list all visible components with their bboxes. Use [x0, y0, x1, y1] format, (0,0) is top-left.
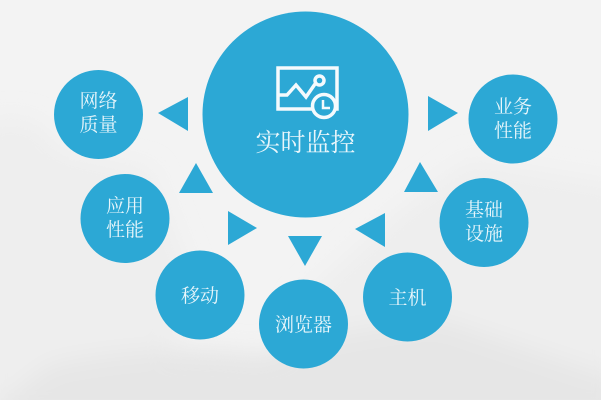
node: 主机: [363, 252, 452, 342]
node: 业务性能: [468, 74, 558, 164]
node: 浏览器: 浏览器: [275, 314, 332, 336]
arrow: up from 基础设施: [404, 162, 438, 192]
arrow: right from 移动: [228, 211, 257, 245]
node: 移动: [156, 250, 244, 340]
arrow: to 网络质量: [158, 97, 188, 131]
node: 应用性能: 性能: [106, 219, 144, 241]
node: 网络质量: [54, 70, 143, 159]
central circle: 实时监控: [202, 12, 408, 218]
heading: 实时监控: 实时监控: [255, 129, 356, 157]
icon: monitoring chart with clock: [278, 68, 337, 118]
node: 主机: 主机: [388, 287, 427, 309]
node: 业务性能: 业务: [494, 96, 532, 118]
node: 应用性能: 应用: [106, 195, 144, 217]
node: 基础设施: [440, 178, 528, 267]
node: 基础设施: 基础: [465, 199, 503, 221]
arrow: to 业务性能: [428, 96, 458, 131]
node: 基础设施: 设施: [465, 223, 503, 245]
node: 业务性能: 性能: [494, 120, 532, 142]
node: 浏览器: [259, 280, 348, 368]
arrow: up from 应用性能: [179, 163, 213, 193]
arrow: down to 浏览器: [288, 236, 322, 266]
arrow: left from 主机: [355, 213, 385, 247]
node: 网络质量: 网络: [79, 90, 118, 112]
node: 移动: 移动: [181, 285, 219, 307]
node: 应用性能: [80, 174, 170, 263]
node: 网络质量: 质量: [79, 114, 118, 136]
